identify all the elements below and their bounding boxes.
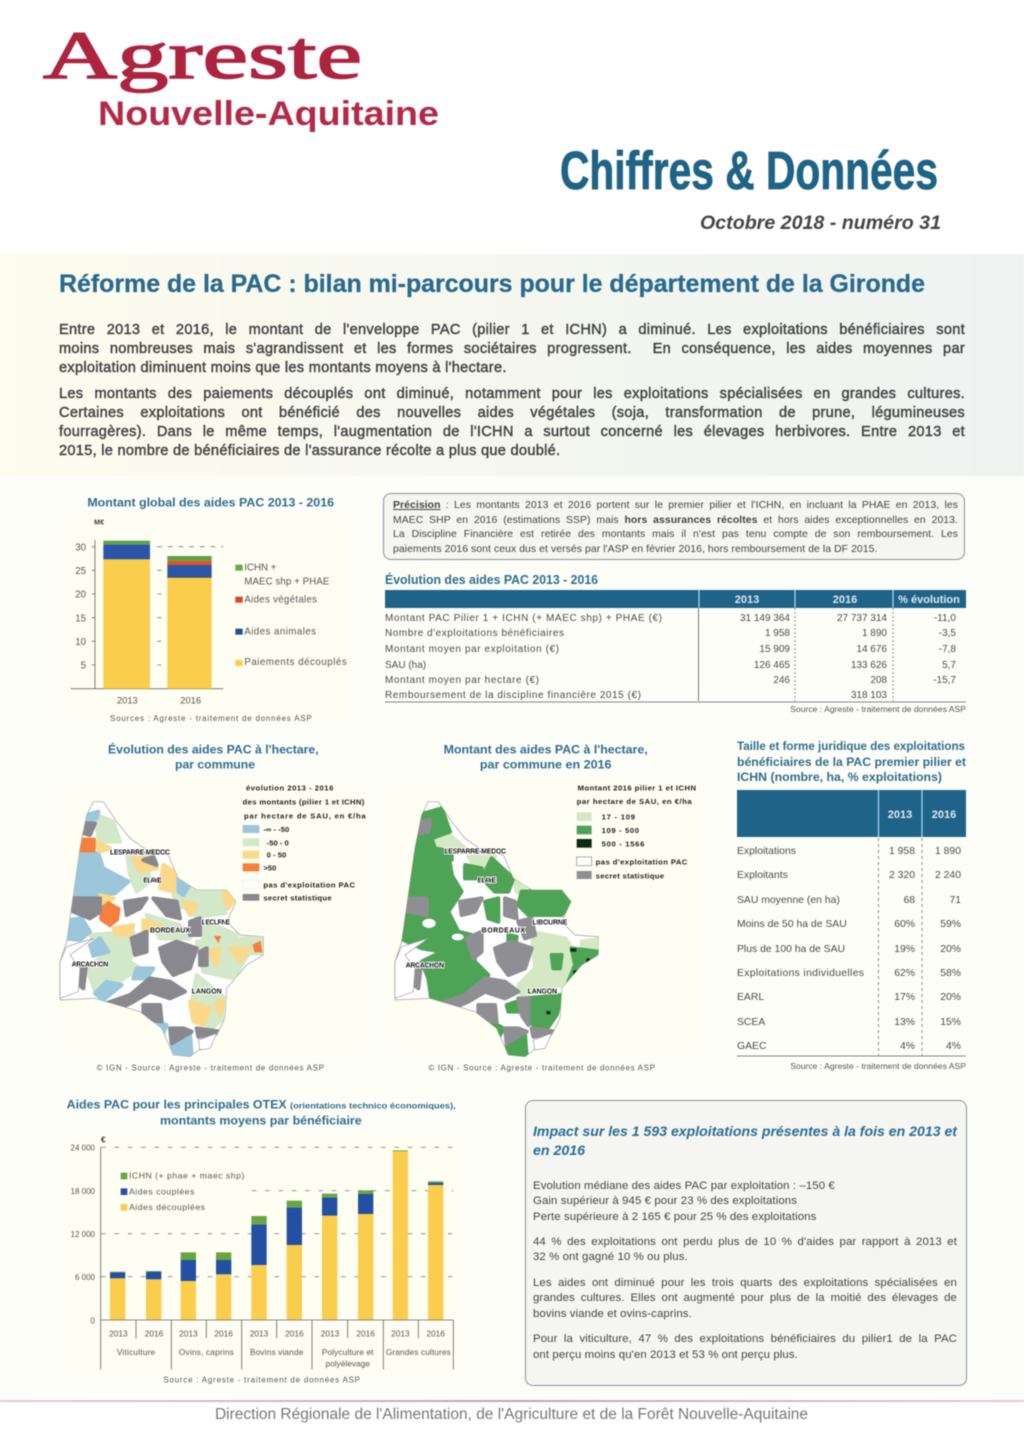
chart: Montant global des aides PAC 2013 - 2016: 10 — [75, 637, 86, 648]
chart: Aides PAC pour les principales OTEX: 2013 — [109, 1328, 128, 1338]
stacked bars — [110, 1150, 443, 1320]
map town labels — [406, 848, 568, 996]
chart: Aides PAC pour les principales OTEX: 2016 — [356, 1328, 375, 1338]
map legend: évolution 2013 - 2016 — [246, 783, 333, 792]
text block: Impact details: 32 % ont gagné 10 % ou plus. — [533, 1251, 688, 1263]
text block: introduction paragraphs: exploitation diminuent moins que les montants moyens à l'hectare. — [59, 360, 507, 376]
gridlines — [101, 1147, 453, 1277]
map legend: Montant 2016 pilier 1 et ICHN — [578, 783, 696, 792]
callout: Précision — [383, 493, 965, 560]
map town labels: LIBOURNE — [532, 919, 568, 926]
table: Taille et forme juridique des exploitations: Source : Agreste - traitement de données ASP — [790, 1061, 966, 1071]
chart: Aides PAC pour les principales OTEX: 0 — [91, 1316, 96, 1325]
table: Taille et forme juridique des exploitations: 15% — [940, 1017, 961, 1028]
map legend: 500 - 1566 — [602, 839, 644, 848]
table: Taille et forme juridique des exploitations: SCEA — [737, 1017, 765, 1028]
map legend: -∞ - -50 — [263, 825, 289, 834]
map town labels: LESPARRE-MEDOC — [444, 848, 506, 855]
map: Montant des aides PAC à l'hectare en 2016: © IGN - Source : Agreste - traitement de données ASP — [428, 1063, 655, 1072]
text block: Impact details: Evolution médiane des aides PAC par exploitation : –150 € — [533, 1180, 835, 1192]
map legend: -50 - 0 — [267, 838, 289, 847]
text block: introduction paragraphs: fourragères). Dans le même temps, l'augmentation de l'ICHN a surtout concerné les élevages herbivores. Entre 2013 et — [59, 424, 965, 440]
table: Taille et forme juridique des exploitations: 68 — [903, 895, 915, 906]
legend: Aides végétales — [244, 595, 317, 606]
text block: Impact heading — [532, 1124, 958, 1159]
map legend — [577, 783, 696, 880]
table: Taille et forme juridique des exploitations: 4% — [900, 1041, 915, 1052]
publication heading: Chiffres & Données: Octobre 2018 - numéro 31 — [700, 213, 941, 234]
map legend: des montants (pilier 1 et ICHN) — [243, 797, 365, 806]
text block: introduction paragraphs: moins nombreuses mais s'agrandissent et les formes sociétaires progressent. En conséquence, les aides moyennes par — [59, 341, 965, 357]
panel: introduction band — [0, 254, 1024, 476]
chart: Montant global des aides PAC 2013 - 2016: 25 — [75, 566, 86, 577]
chart: Montant global des aides PAC 2013 - 2016: 2013 — [117, 695, 138, 705]
table: Taille et forme juridique des exploitations: 2016 — [932, 809, 956, 821]
text block: Impact details — [532, 1180, 958, 1362]
table: Taille et forme juridique des exploitations: 60% — [894, 919, 915, 930]
table: Évolution des aides PAC 2013 - 2016: 14 676 — [856, 644, 887, 655]
chart: Montant global des aides PAC 2013 - 2016: Sources : Agreste - traitement de données ASP — [110, 714, 312, 723]
chart: Montant global des aides PAC 2013 - 2016: 20 — [75, 590, 86, 601]
table: Taille et forme juridique des exploitations: 62% — [894, 968, 915, 979]
map legend: par hectare de SAU, en €/ha — [244, 811, 366, 820]
table: Évolution des aides PAC 2013 - 2016: Source : Agreste - traitement de données ASP — [790, 704, 966, 714]
footer text: Direction Régionale de l'Alimentation, de l'Agriculture et de la Forêt Nouvelle-Aquitaine — [215, 1406, 808, 1423]
chart: Aides PAC pour les principales OTEX: 2016 — [145, 1328, 164, 1338]
table: Taille et forme juridique des exploitations: SAU moyenne (en ha) — [737, 895, 840, 906]
chart: Aides PAC pour les principales OTEX: 2016 — [285, 1328, 304, 1338]
map legend: 0 - 50 — [267, 851, 286, 860]
table: Évolution des aides PAC 2013 - 2016: 126 465 — [754, 660, 790, 671]
legend: Aides couplées — [129, 1186, 195, 1196]
map legend: 17 - 109 — [602, 813, 635, 822]
chart: Aides PAC pour les principales OTEX: 2016 — [214, 1328, 233, 1338]
text block: Impact details: ont perçu moins qu'en 2013 et 53 % ont perçu plus. — [533, 1349, 798, 1361]
background: lower page tint — [0, 475, 1024, 1395]
table: Taille et forme juridique des exploitations: 20% — [940, 992, 961, 1003]
chart: Aides PAC pour les principales OTEX: (orientations technico économiques), — [290, 1100, 456, 1110]
map legend — [243, 783, 366, 902]
text block: Impact heading: Impact sur les 1 593 exploitations présentes à la fois en 2013 et — [533, 1124, 958, 1140]
table: Taille et forme juridique des exploitations: 1 958 — [889, 846, 915, 857]
table: Évolution des aides PAC 2013 - 2016: 5,7 — [942, 660, 956, 671]
legend: Aides animales — [244, 627, 316, 638]
table: Taille et forme juridique des exploitations: EARL — [737, 992, 764, 1003]
map legend: >50 — [263, 863, 276, 872]
map legend: pas d'exploitation PAC — [263, 881, 355, 890]
table: Évolution des aides PAC 2013 - 2016: Montant moyen par hectare (€) — [385, 675, 539, 686]
table: Évolution des aides PAC 2013 - 2016: -3,5 — [939, 628, 956, 639]
table: Évolution des aides PAC 2013 - 2016: 2016 — [833, 594, 857, 606]
table: Taille et forme juridique des exploitations: 58% — [940, 968, 961, 979]
map town labels: BLAYE — [143, 878, 162, 885]
text block: Impact heading: en 2016 — [533, 1143, 585, 1159]
chart: Aides PAC pour les principales OTEX: 2013 — [391, 1328, 410, 1338]
table: Évolution des aides PAC 2013 - 2016: 318 103 — [851, 690, 887, 701]
text block: Impact details: 44 % des exploitations ont perdu plus de 10 % d'aides par rapport à 2013 et — [533, 1236, 957, 1248]
axis and categories — [101, 1147, 453, 1369]
chart: Aides PAC pour les principales OTEX: Grandes cultures — [386, 1347, 451, 1357]
text block: introduction paragraphs — [58, 322, 966, 459]
map: Montant des aides PAC à l'hectare en 2016 — [394, 743, 696, 1073]
map: Évolution des aides PAC à l'hectare: par commune — [175, 758, 255, 772]
legend: Aides découplées — [129, 1202, 206, 1212]
map town labels: BORDEAUX — [482, 928, 525, 935]
map town labels: LESPARRE-MEDOC — [110, 849, 170, 856]
table: Taille et forme juridique des exploitations: 71 — [949, 895, 961, 906]
table: Taille et forme juridique des exploitations: Exploitants — [737, 870, 788, 881]
map town labels: LIBOURNE — [202, 919, 230, 926]
table: Évolution des aides PAC 2013 - 2016: 2013 — [735, 594, 759, 606]
map: Évolution des aides PAC à l'hectare: © IGN - Source : Agreste - traitement de données ASP — [97, 1063, 324, 1072]
chart: Montant global des aides PAC 2013 - 2016: 30 — [75, 542, 86, 553]
table: Évolution des aides PAC 2013 - 2016: 27 737 314 — [837, 613, 887, 624]
chart: Montant global des aides PAC 2013 - 2016: 5 — [81, 661, 86, 672]
text block: Impact details: Gain supérieur à 945 € pour 23 % des exploitations — [533, 1195, 797, 1207]
table: Évolution des aides PAC 2013 - 2016: Montant PAC Pilier 1 + ICHN (+ MAEC shp) + PHAE (€) — [385, 613, 662, 624]
text block: Précision note: Précision : Les montants 2013 et 2016 portent sur le premier pilier et l'ICHN, en incluant la PHAE en 2013, les — [393, 500, 958, 511]
map town labels: BLAYE — [478, 878, 496, 885]
map: Montant des aides PAC à l'hectare en 2016: Montant des aides PAC à l'hectare, — [444, 743, 648, 757]
text block: Impact details: bovins viande et ovins-caprins. — [533, 1308, 692, 1320]
chart: Aides PAC pour les principales OTEX: Ovins, caprins — [179, 1347, 234, 1357]
table: Taille et forme juridique des exploitations: 17% — [894, 992, 915, 1003]
table: Évolution des aides PAC 2013 - 2016: Montant moyen par exploitation (€) — [385, 644, 559, 655]
table: Taille et forme juridique des exploitations: 2013 — [888, 809, 912, 821]
logo: Agreste Nouvelle-Aquitaine: Nouvelle-Aquitaine — [98, 95, 439, 133]
text block: Impact details: Pour la viticulture, 47 % des exploitations bénéficiaires du pilier1 de la PAC — [533, 1333, 957, 1345]
chart: Montant global des aides PAC 2013 - 2016: M€ — [94, 518, 104, 527]
legend: MAEC shp + PHAE — [244, 577, 330, 588]
table: Évolution des aides PAC 2013 - 2016: Nombre d'exploitations bénéficiaires — [385, 628, 564, 639]
chart: Aides PAC pour les principales OTEX: 2013 — [179, 1328, 198, 1338]
map town labels — [72, 849, 230, 996]
table: Taille et forme juridique des exploitations: Exploitations individuelles — [737, 968, 864, 979]
chart: Aides PAC pour les principales OTEX: 12 000 — [71, 1230, 96, 1239]
table: Évolution des aides PAC 2013 - 2016: -7,8 — [939, 644, 956, 655]
chart: Aides PAC pour les principales OTEX: Viticulture — [117, 1347, 156, 1357]
text block: Impact details: Les aides ont diminué pour les trois quarts des exploitations spécialisées en — [533, 1277, 957, 1289]
chart: Aides PAC pour les principales OTEX: 24 000 — [71, 1144, 96, 1153]
stacked bars — [103, 541, 212, 689]
legend: ICHN (+ phae + maec shp) — [129, 1171, 244, 1181]
text block: Précision note: MAEC SHP en 2016 (estimations SSP) mais hors assurances récoltes et hors aides exceptionnelles en 2013. — [393, 515, 958, 526]
table: Taille et forme juridique des exploitations: Exploitations — [737, 846, 796, 857]
chart: Aides PAC pour les principales OTEX: 6 000 — [75, 1273, 96, 1282]
table: Taille et forme juridique des exploitations: Moins de 50 ha de SAU — [737, 919, 847, 930]
map: Évolution des aides PAC à l'hectare — [58, 742, 366, 1073]
text block: Précision note — [392, 500, 958, 555]
map legend: par hectare de SAU, en €/ha — [577, 797, 692, 806]
logo: Agreste Nouvelle-Aquitaine — [42, 20, 439, 133]
table: Évolution des aides PAC 2013 - 2016: SAU (ha) — [385, 660, 426, 671]
map legend: secret statistique — [263, 893, 332, 902]
panel: Impact box — [525, 1100, 967, 1386]
table: Évolution des aides PAC 2013 - 2016: 246 — [773, 675, 790, 686]
chart: Montant global des aides PAC 2013 - 2016: 2016 — [180, 695, 201, 705]
chart: Aides PAC pour les principales OTEX: Polyculture et — [322, 1347, 374, 1357]
text block: introduction paragraphs: Certaines exploitations ont bénéficié des nouvelles aides végétales (soja, transformation de prune, légumineuses — [59, 405, 965, 421]
chart: Aides PAC pour les principales OTEX: Bovins viande — [250, 1347, 304, 1357]
table: Évolution des aides PAC 2013 - 2016: 1 890 — [862, 628, 887, 639]
chart: Aides PAC pour les principales OTEX: montants moyens par bénéficiaire — [160, 1114, 362, 1128]
text block: Précision note: La Discipline Financière est retirée des montants mais il n'est pas tenu compte de son remboursement. Les — [393, 529, 958, 540]
text block: Précision note: paiements 2016 sont ceux dus et versés par l'ASP en février 2016, hors remboursement de la DF 2015. — [393, 544, 877, 555]
table: Évolution des aides PAC 2013 - 2016: 15 909 — [759, 644, 790, 655]
map town labels: ARCACHON — [406, 962, 444, 969]
table: Évolution des aides PAC 2013 - 2016: -15,7 — [933, 675, 956, 686]
table: Évolution des aides PAC 2013 - 2016: Remboursement de la discipline financière 2015 (€) — [385, 690, 641, 701]
publication heading: Chiffres & Données — [560, 141, 941, 234]
footer rule — [0, 1400, 1024, 1402]
table: Taille et forme juridique des exploitations: 59% — [940, 919, 961, 930]
text block: introduction paragraphs: Les montants des paiements découplés ont diminué, notamment pour les exploitations spécialisées en grandes cultures. — [59, 386, 965, 402]
map town labels: BORDEAUX — [150, 928, 190, 935]
table: Taille et forme juridique des exploitations: Taille et forme juridique des exploitations — [737, 739, 965, 753]
legend: Paiements découplés — [244, 657, 347, 668]
table: Taille et forme juridique des exploitations: bénéficiaires de la PAC premier pilier et — [737, 755, 966, 769]
table: Taille et forme juridique des exploitations — [736, 739, 967, 1072]
table: Taille et forme juridique des exploitations: Plus de 100 ha de SAU — [737, 944, 845, 955]
table: Taille et forme juridique des exploitations: 2 320 — [889, 870, 915, 881]
table: Taille et forme juridique des exploitations: 20% — [940, 944, 961, 955]
table: Taille et forme juridique des exploitations: 4% — [946, 1041, 961, 1052]
legend: ICHN + — [244, 563, 277, 574]
main title: Réforme de la PAC : bilan mi-parcours pour le département de la Gironde — [59, 270, 925, 298]
map town labels: LANGON — [192, 989, 222, 996]
axis and ticks — [71, 540, 223, 689]
chart: Montant global des aides PAC 2013 - 2016 — [70, 496, 348, 724]
text block: introduction paragraphs: Entre 2013 et 2016, le montant de l'enveloppe PAC (pilier 1 et ICHN) a diminué. Les exploitations bénéficiaires sont — [59, 322, 965, 338]
chart: Montant global des aides PAC 2013 - 2016: Montant global des aides PAC 2013 - 2016 — [87, 497, 335, 510]
table: Évolution des aides PAC 2013 - 2016: 31 149 364 — [740, 613, 790, 624]
map legend: secret statistique — [596, 871, 664, 880]
legend — [235, 563, 347, 668]
table: Évolution des aides PAC 2013 - 2016: % évolution — [898, 594, 960, 606]
map: Évolution des aides PAC à l'hectare: Évolution des aides PAC à l'hectare, — [108, 742, 319, 757]
table: Taille et forme juridique des exploitations: ICHN (nombre, ha, % exploitations) — [737, 770, 942, 784]
text block: Impact details: grandes cultures. Elles ont augmenté pour plus de la moitié des élevages de — [533, 1292, 957, 1304]
table: Taille et forme juridique des exploitations: 2 240 — [935, 870, 961, 881]
table: Évolution des aides PAC 2013 - 2016 — [384, 572, 967, 714]
table: Évolution des aides PAC 2013 - 2016: -11,0 — [934, 613, 956, 624]
map legend: 109 - 500 — [602, 826, 639, 835]
commune map — [395, 802, 602, 1057]
chart: Aides PAC pour les principales OTEX: 2016 — [426, 1328, 445, 1338]
table: Évolution des aides PAC 2013 - 2016: Évolution des aides PAC 2013 - 2016 — [385, 572, 598, 587]
map town labels: ARCACHON — [72, 962, 108, 969]
chart: Aides PAC pour les principales OTEX — [66, 1097, 456, 1385]
map: Montant des aides PAC à l'hectare en 2016: par commune en 2016 — [480, 758, 612, 772]
chart: Aides PAC pour les principales OTEX: Source : Agreste - traitement de données ASP — [163, 1375, 360, 1384]
table: Taille et forme juridique des exploitations: GAEC — [737, 1041, 767, 1052]
map town labels: LANGON — [528, 989, 557, 996]
table: Taille et forme juridique des exploitations: 19% — [894, 944, 915, 955]
text block: introduction paragraphs: 2015, le nombre de bénéficiaires de l'assurance récolte a plus que doublé. — [59, 443, 560, 459]
chart: Aides PAC pour les principales OTEX: 2013 — [321, 1328, 340, 1338]
commune map — [60, 802, 263, 1057]
chart: Aides PAC pour les principales OTEX: € — [101, 1136, 106, 1145]
map legend: pas d'exploitation PAC — [596, 857, 688, 866]
table: Taille et forme juridique des exploitations: 1 890 — [935, 846, 961, 857]
chart: Aides PAC pour les principales OTEX: 18 000 — [71, 1187, 96, 1196]
chart: Aides PAC pour les principales OTEX: Aides PAC pour les principales OTEX — [67, 1097, 287, 1111]
legend — [121, 1171, 244, 1212]
table: Évolution des aides PAC 2013 - 2016: 133 626 — [851, 660, 887, 671]
table: Évolution des aides PAC 2013 - 2016: 1 958 — [765, 628, 790, 639]
table: Évolution des aides PAC 2013 - 2016: 208 — [870, 675, 887, 686]
chart: Aides PAC pour les principales OTEX: 2013 — [250, 1328, 269, 1338]
chart: Aides PAC pour les principales OTEX: polyélevage — [325, 1359, 370, 1369]
table: Taille et forme juridique des exploitations: 13% — [894, 1017, 915, 1028]
chart: Montant global des aides PAC 2013 - 2016: 15 — [75, 613, 86, 624]
text block: Impact details: Perte supérieure à 2 165 € pour 25 % des exploitations — [533, 1211, 816, 1223]
